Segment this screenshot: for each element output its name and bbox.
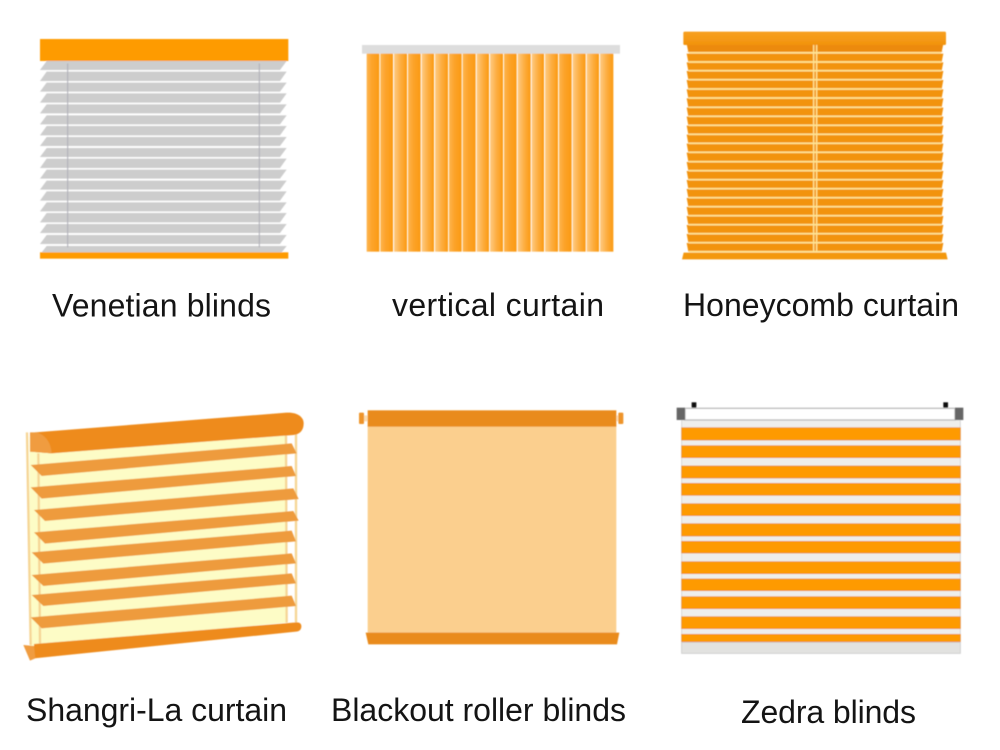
illustration: Shangri-La curtain: [23, 413, 304, 661]
panel: vertical curtain: [362, 45, 620, 323]
right clip: [943, 402, 948, 408]
left bracket: [359, 413, 364, 424]
sheer fabric: [29, 430, 287, 646]
ladder strings: [68, 63, 259, 247]
bottom bar: [366, 633, 619, 644]
left clip: [692, 402, 696, 408]
sheer fabric: [682, 420, 960, 653]
right bracket: [618, 413, 623, 424]
illustration: vertical curtain: [362, 45, 620, 252]
label: Venetian blinds: Venetian blinds: [52, 288, 271, 324]
right end cap: [955, 408, 963, 420]
panel: Zedra blinds: [677, 402, 963, 730]
panel: Honeycomb curtain: [682, 32, 959, 323]
orange pleats: [687, 52, 943, 252]
vertical slats: [367, 53, 613, 252]
label: Shangri-La curtain: Shangri-La curtain: [26, 692, 287, 728]
bottom panel: [682, 642, 960, 653]
left end cap: [677, 408, 685, 420]
panel: Blackout roller blinds: [331, 410, 626, 728]
bottom rail: [682, 253, 948, 259]
illustration: Zedra blinds: [677, 402, 963, 653]
top roller: [30, 413, 304, 453]
angled slats: [31, 443, 299, 628]
pale pleat lines: [689, 53, 941, 252]
shadowed pleat under the head: [687, 44, 943, 52]
bottom roller end cap: [23, 645, 35, 661]
panel: Shangri-La curtain: [23, 413, 304, 728]
illustration: Honeycomb curtain: [682, 32, 948, 259]
label: vertical curtain: vertical curtain: [392, 287, 604, 323]
label: Zedra blinds: Zedra blinds: [741, 694, 916, 730]
illustration: Blackout roller blinds: [359, 410, 623, 644]
top roller end cap: [30, 432, 52, 453]
bottom roller: [34, 622, 301, 658]
centre cords: [814, 45, 817, 252]
label: Honeycomb curtain: Honeycomb curtain: [683, 287, 959, 323]
panel: Venetian blinds: [40, 39, 288, 324]
orange bottom rail: [40, 252, 288, 259]
head rail: [683, 32, 946, 45]
white head rail: [685, 408, 955, 420]
orange stripes: [682, 428, 960, 642]
grey slats: [40, 61, 287, 252]
grey top rail: [362, 45, 620, 54]
label: Blackout roller blinds: Blackout roller blinds: [331, 692, 626, 728]
bracket links: [364, 415, 618, 421]
side cords: [27, 432, 296, 645]
illustration: Venetian blinds: [40, 39, 288, 259]
roller head: [368, 410, 616, 427]
orange headrail: [40, 39, 288, 61]
roller fabric: [368, 426, 616, 633]
